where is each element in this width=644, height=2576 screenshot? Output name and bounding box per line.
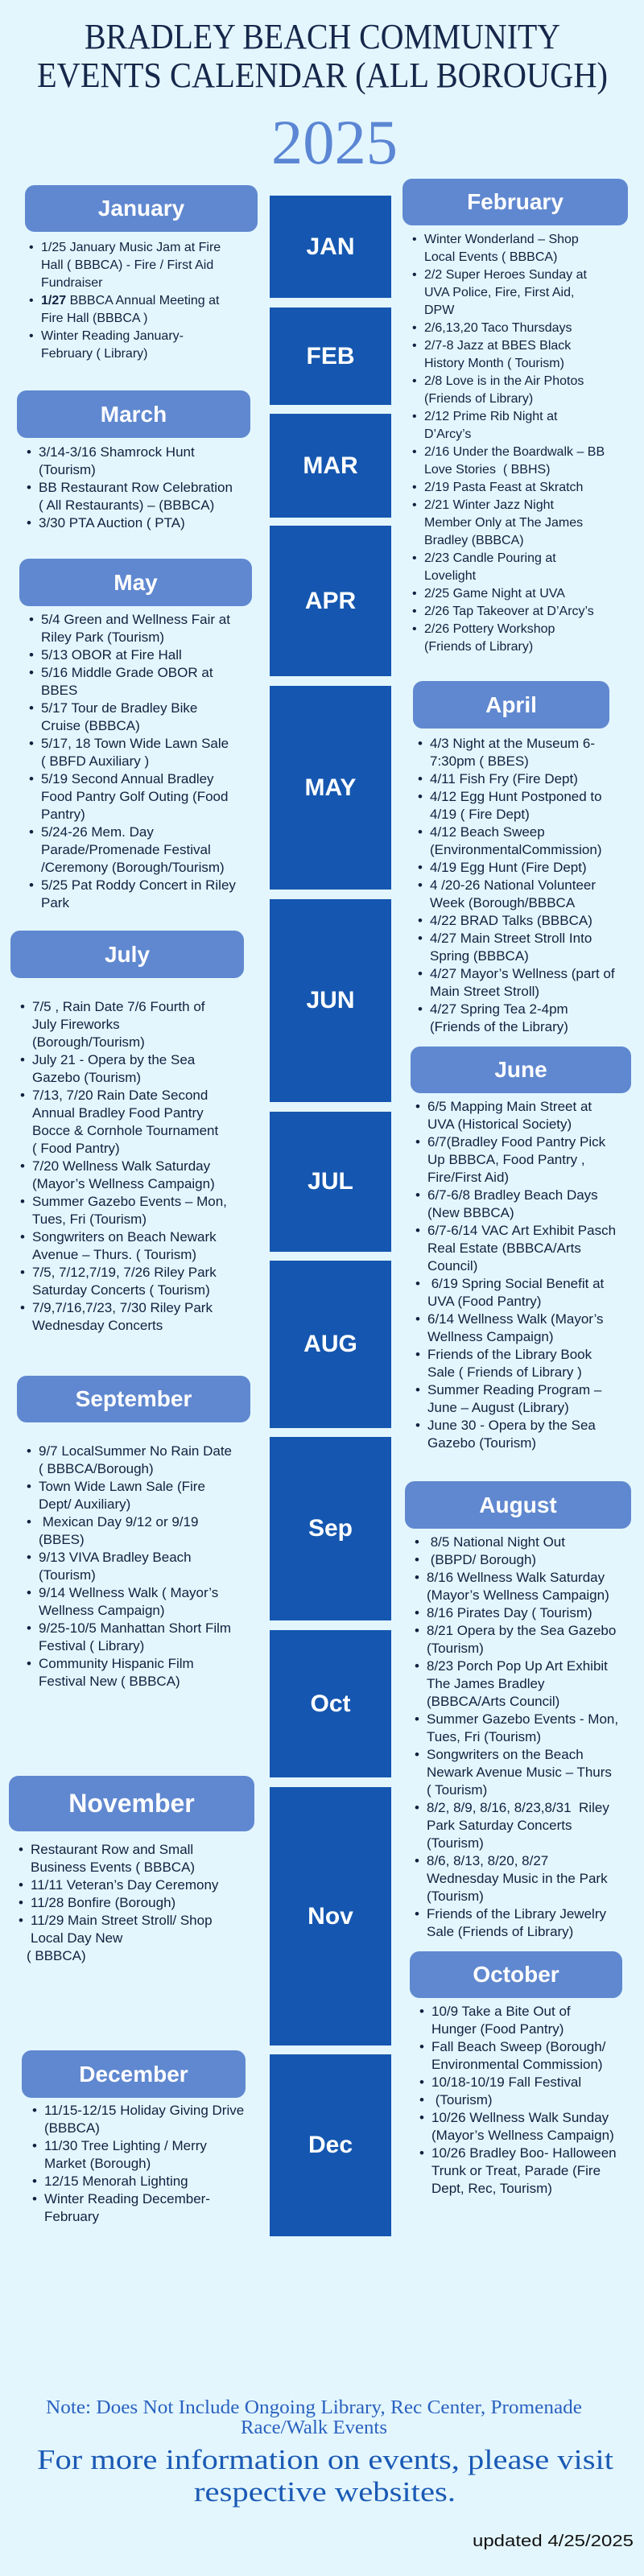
- list: February: Bradley (BBBCA): [424, 534, 524, 547]
- list: June: Wellness Campaign): [427, 1329, 554, 1344]
- more info text: For more information on events, please visit: [37, 2444, 613, 2475]
- list: February: 2/7-8 Jazz at BBES Black: [424, 339, 571, 353]
- list: April: Week (Borough/BBBCA: [430, 895, 575, 910]
- list: January: Winter Reading January-: [41, 329, 184, 343]
- list: April: [419, 736, 615, 1034]
- list: May: 5/13 OBOR at Fire Hall: [41, 647, 182, 663]
- header: March: [17, 390, 250, 438]
- list: October: Trunk or Treat, Parade (Fire: [431, 2163, 601, 2178]
- header: July: July: [105, 942, 150, 966]
- list: August: (Mayor’s Wellness Campaign): [427, 1587, 609, 1603]
- list: October: 10/26 Bradley Boo- Halloween: [431, 2145, 617, 2161]
- header: October: October: [473, 1962, 559, 1987]
- list: August: ( Tourism): [427, 1782, 487, 1798]
- list: November: Restaurant Row and Small: [31, 1842, 193, 1857]
- list: August: 8/2, 8/9, 8/16, 8/23,8/31 Riley: [427, 1800, 609, 1815]
- list: August: Tues, Fri (Tourism): [427, 1729, 541, 1744]
- list: June: Real Estate (BBBCA/Arts: [427, 1241, 581, 1256]
- list: September: 9/13 VIVA Bradley Beach: [39, 1550, 192, 1565]
- list: February: 2/6,13,20 Taco Thursdays: [424, 321, 572, 335]
- list: August: 8/16 Wellness Walk Saturday: [427, 1570, 605, 1585]
- list: May: Riley Park (Tourism): [41, 630, 164, 645]
- list: August: Park Saturday Concerts: [427, 1818, 572, 1833]
- list: June: Gazebo (Tourism): [427, 1435, 536, 1451]
- list: June: June – August (Library): [427, 1400, 569, 1415]
- list: June: UVA (Food Pantry): [427, 1294, 541, 1309]
- title: BRADLEY BEACH COMMUNITY: [85, 17, 560, 56]
- note text: [46, 2397, 582, 2438]
- list: October: (Mayor’s Wellness Campaign): [431, 2128, 614, 2143]
- list: July: Avenue – Thurs. ( Tourism): [32, 1247, 196, 1262]
- list: July: Gazebo (Tourism): [32, 1070, 141, 1085]
- title: EVENTS CALENDAR (ALL BOROUGH): [37, 56, 608, 95]
- header: August: [405, 1481, 631, 1529]
- header: September: [17, 1376, 250, 1422]
- list: July: (Mayor’s Wellness Campaign): [32, 1176, 215, 1191]
- list: June: June 30 - Opera by the Sea: [427, 1418, 596, 1433]
- list: April: 4/11 Fish Fry (Fire Dept): [430, 771, 578, 786]
- list: June: Up BBBCA, Food Pantry ,: [427, 1152, 585, 1167]
- list: December: 11/30 Tree Lighting / Merry: [44, 2138, 207, 2153]
- list: July: July 21 - Opera by the Sea: [32, 1052, 195, 1067]
- list: December: February: [44, 2209, 99, 2224]
- list: September: 9/14 Wellness Walk ( Mayor’s: [39, 1585, 218, 1600]
- list: June: Council): [427, 1258, 477, 1274]
- list: July: Saturday Concerts ( Tourism): [32, 1282, 210, 1298]
- header: September: September: [76, 1386, 192, 1411]
- list: July: 7/20 Wellness Walk Saturday: [32, 1158, 210, 1174]
- list: February: (Friends of Library): [424, 392, 533, 406]
- list: August: Sale (Friends of Library): [427, 1924, 573, 1939]
- list: June: 6/14 Wellness Walk (Mayor’s: [427, 1311, 604, 1327]
- updated date: updated 4/25/2025: [473, 2533, 634, 2550]
- list: July: 7/9,7/16,7/23, 7/30 Riley Park: [32, 1300, 213, 1315]
- list: August: (Tourism): [427, 1835, 484, 1851]
- header: December: December: [79, 2061, 188, 2087]
- list: October: [420, 2004, 617, 2196]
- header: June: June: [494, 1057, 547, 1082]
- list: July: Summer Gazebo Events – Mon,: [32, 1194, 227, 1209]
- list: April: Spring (BBBCA): [430, 948, 529, 964]
- list: February: DPW: [424, 303, 454, 317]
- list: November: Local Day New: [31, 1930, 122, 1946]
- list: February: 2/16 Under the Boardwalk – BB: [424, 445, 605, 459]
- list: December: (BBBCA): [44, 2120, 100, 2136]
- header: March: March: [101, 401, 167, 427]
- title: 2025: [271, 107, 398, 177]
- header: May: [19, 559, 252, 606]
- list: May: 5/17, 18 Town Wide Lawn Sale: [41, 736, 229, 751]
- list: June: 6/7(Bradley Food Pantry Pick: [427, 1134, 605, 1150]
- list: August: [415, 1534, 618, 1939]
- list: August: Songwriters on the Beach: [427, 1747, 584, 1762]
- list: September: 9/7 LocalSummer No Rain Date: [39, 1443, 232, 1459]
- list: February: 2/12 Prime Rib Night at: [424, 410, 557, 423]
- list: August: (Tourism): [427, 1889, 484, 1904]
- list: March: BB Restaurant Row Celebration: [39, 480, 233, 495]
- list: February: 2/2 Super Heroes Sunday at: [424, 268, 587, 282]
- list: February: UVA Police, Fire, First Aid,: [424, 286, 574, 299]
- list: September: [27, 1443, 232, 1689]
- list: September: 9/25-10/5 Manhattan Short Film: [39, 1620, 231, 1636]
- list: June: (New BBBCA): [427, 1205, 514, 1220]
- list: September: Dept/ Auxiliary): [39, 1496, 130, 1512]
- timeline month blocks: JUN: [306, 987, 354, 1013]
- header: June: [411, 1046, 631, 1093]
- list: April: 7:30pm ( BBES): [430, 753, 529, 769]
- list: August: (BBBCA/Arts Council): [427, 1694, 559, 1709]
- list: January: [29, 241, 221, 361]
- list: December: 12/15 Menorah Lighting: [44, 2174, 188, 2189]
- list: July: 7/13, 7/20 Rain Date Second: [32, 1088, 208, 1103]
- header: August: August: [479, 1492, 557, 1517]
- list: July: 7/5 , Rain Date 7/6 Fourth of: [32, 999, 205, 1014]
- header: July: [10, 931, 244, 978]
- list: May: 5/24-26 Mem. Day: [41, 824, 154, 840]
- list: September: Festival ( Library): [39, 1638, 144, 1653]
- list: August: The James Bradley: [427, 1676, 544, 1691]
- timeline month blocks: Oct: [310, 1690, 351, 1716]
- list: September: Community Hispanic Film: [39, 1656, 194, 1671]
- list: February: (Friends of Library): [424, 640, 533, 654]
- list: May: Park: [41, 895, 69, 910]
- list: October: Dept, Rec, Tourism): [431, 2181, 552, 2196]
- list: November: [19, 1842, 219, 1963]
- list: June: 6/7-6/8 Bradley Beach Days: [427, 1187, 598, 1203]
- list: April: 4/3 Night at the Museum 6-: [430, 736, 595, 751]
- list: October: (Tourism): [436, 2092, 493, 2107]
- list: December: [32, 2103, 244, 2224]
- list: February: 2/8 Love is in the Air Photos: [424, 374, 584, 388]
- note text: Note: Does Not Include Ongoing Library, Rec Center, Promenade: [46, 2397, 582, 2418]
- list: April: 4/27 Main Street Stroll Into: [430, 931, 592, 946]
- list: April: 4/12 Beach Sweep: [430, 824, 545, 840]
- list: May: 5/25 Pat Roddy Concert in Riley: [41, 877, 236, 893]
- timeline month blocks: Dec: [308, 2132, 353, 2158]
- list: August: Wednesday Music in the Park: [427, 1871, 608, 1886]
- list: January: Fundraiser: [41, 276, 102, 290]
- list: September: Mexican Day 9/12 or 9/19: [43, 1514, 198, 1530]
- list: October: 10/26 Wellness Walk Sunday: [431, 2110, 609, 2125]
- list: June: UVA (Historical Society): [427, 1117, 572, 1132]
- list: September: ( BBBCA/Borough): [39, 1461, 154, 1476]
- list: February: 2/23 Candle Pouring at: [424, 551, 556, 565]
- list: July: Tues, Fri (Tourism): [32, 1212, 147, 1227]
- list: February: 2/25 Game Night at UVA: [424, 587, 565, 601]
- list: April: (Friends of the Library): [430, 1019, 568, 1034]
- list: July: 7/5, 7/12,7/19, 7/26 Riley Park: [32, 1265, 217, 1280]
- note text: Race/Walk Events: [241, 2417, 387, 2438]
- list: November: 11/29 Main Street Stroll/ Shop: [31, 1913, 213, 1928]
- list: May: 5/16 Middle Grade OBOR at: [41, 665, 213, 680]
- list: November: 11/28 Bonfire (Borough): [31, 1895, 175, 1910]
- list: February: Lovelight: [424, 569, 476, 583]
- list: April: 4/22 BRAD Talks (BBBCA): [430, 913, 592, 928]
- list: December: Winter Reading December-: [44, 2191, 210, 2207]
- list: May: 5/4 Green and Wellness Fair at: [41, 612, 230, 627]
- list: February: 2/21 Winter Jazz Night: [424, 498, 554, 512]
- list: February: 2/26 Pottery Workshop: [424, 622, 555, 636]
- list: October: 10/9 Take a Bite Out of: [431, 2004, 571, 2019]
- list: May: 5/17 Tour de Bradley Bike: [41, 700, 197, 716]
- list: April: 4/19 ( Fire Dept): [430, 807, 530, 822]
- header: January: January: [98, 196, 184, 221]
- list: June: Friends of the Library Book: [427, 1347, 592, 1362]
- list: July: [21, 999, 227, 1333]
- list: June: Summer Reading Program –: [427, 1382, 601, 1397]
- list: September: (BBES): [39, 1532, 85, 1547]
- list: August: 8/21 Opera by the Sea Gazebo: [427, 1623, 616, 1638]
- list: February: History Month ( Tourism): [424, 357, 564, 370]
- header: October: [410, 1951, 622, 1998]
- list: June: 6/19 Spring Social Benefit at: [431, 1276, 604, 1291]
- timeline month blocks: JAN: [306, 233, 354, 259]
- list: November: 11/11 Veteran’s Day Ceremony: [31, 1877, 218, 1893]
- list: February: D’Arcy’s: [424, 427, 471, 441]
- list: October: Hunger (Food Pantry): [431, 2021, 564, 2037]
- list: June: 6/7-6/14 VAC Art Exhibit Pasch: [427, 1223, 616, 1238]
- timeline month blocks: Sep: [308, 1515, 353, 1542]
- list: January: Hall ( BBBCA) - Fire / First Aid: [41, 258, 213, 272]
- list: February: 2/19 Pasta Feast at Skratch: [424, 481, 583, 494]
- list: January: 1/27 BBBCA Annual Meeting at: [41, 294, 219, 308]
- list: May: /Ceremony (Borough/Tourism): [41, 860, 225, 875]
- header: April: [413, 681, 609, 729]
- list: April: (EnvironmentalCommission): [430, 842, 602, 857]
- list: November: Business Events ( BBBCA): [31, 1860, 195, 1875]
- list: November: ( BBBCA): [27, 1948, 86, 1963]
- list: August: 8/16 Pirates Day ( Tourism): [427, 1605, 592, 1620]
- header: November: [9, 1776, 254, 1831]
- header: December: [22, 2050, 246, 2098]
- more info text: [37, 2444, 613, 2508]
- list: August: Friends of the Library Jewelry: [427, 1906, 606, 1922]
- footer notes: [37, 2397, 634, 2550]
- list: June: [415, 1099, 616, 1451]
- list: July: Bocce & Cornhole Tournament: [32, 1123, 218, 1138]
- list: March: (Tourism): [39, 462, 96, 477]
- list: February: Love Stories ( BBHS): [424, 463, 551, 477]
- list: April: 4/27 Mayor’s Wellness (part of: [430, 966, 615, 981]
- list: October: Fall Beach Sweep (Borough/: [431, 2039, 605, 2054]
- list: February: Winter Wonderland – Shop: [424, 233, 579, 246]
- header: February: February: [467, 189, 564, 214]
- list: July: Annual Bradley Food Pantry: [32, 1105, 204, 1121]
- list: March: 3/30 PTA Auction ( PTA): [39, 515, 185, 530]
- header: February: [402, 179, 628, 225]
- list: March: 3/14-3/16 Shamrock Hunt: [39, 444, 195, 460]
- list: April: Main Street Stroll): [430, 984, 539, 999]
- list: April: 4/12 Egg Hunt Postponed to: [430, 789, 602, 804]
- list: August: (BBPD/ Borough): [431, 1552, 536, 1567]
- list: January: Fire Hall (BBBCA ): [41, 312, 147, 325]
- list: April: 4 /20-26 National Volunteer: [430, 877, 596, 893]
- list: August: Newark Avenue Music – Thurs: [427, 1765, 612, 1780]
- list: August: 8/5 National Night Out: [431, 1534, 565, 1550]
- list: May: Pantry): [41, 807, 85, 822]
- header: January: [25, 185, 258, 232]
- timeline month blocks: MAY: [305, 774, 356, 800]
- list: September: (Tourism): [39, 1567, 96, 1583]
- list: February: [412, 233, 605, 654]
- timeline month blocks: JUL: [308, 1168, 353, 1195]
- list: July: (Borough/Tourism): [32, 1034, 145, 1050]
- list: May: 5/19 Second Annual Bradley: [41, 771, 214, 786]
- list: April: 4/19 Egg Hunt (Fire Dept): [430, 860, 587, 875]
- list: September: Wellness Campaign): [39, 1603, 165, 1618]
- header: May: May: [114, 570, 158, 594]
- list: August: (Tourism): [427, 1641, 484, 1656]
- list: September: Town Wide Lawn Sale (Fire: [39, 1479, 205, 1494]
- list: August: 8/23 Porch Pop Up Art Exhibit: [427, 1658, 608, 1674]
- list: March: ( All Restaurants) – (BBBCA): [39, 497, 214, 513]
- list: December: Market (Borough): [44, 2156, 151, 2171]
- header: April: April: [485, 692, 537, 716]
- header: November: November: [68, 1789, 195, 1818]
- list: May: BBES: [41, 683, 77, 698]
- list: May: [29, 612, 236, 910]
- list: February: Local Events ( BBBCA): [424, 250, 557, 264]
- timeline month blocks: Nov: [308, 1903, 353, 1929]
- title: [37, 17, 608, 177]
- timeline month blocks: MAR: [303, 452, 358, 478]
- list: May: Food Pantry Golf Outing (Food: [41, 789, 228, 804]
- list: September: Festival New ( BBBCA): [39, 1674, 180, 1689]
- list: May: ( BBFD Auxiliary ): [41, 753, 149, 769]
- list: July: ( Food Pantry): [32, 1141, 120, 1156]
- list: July: Songwriters on Beach Newark: [32, 1229, 217, 1245]
- list: January: 1/25 January Music Jam at Fire: [41, 241, 221, 254]
- list: May: Cruise (BBBCA): [41, 718, 140, 733]
- list: April: 4/27 Spring Tea 2-4pm: [430, 1001, 568, 1017]
- list: July: Wednesday Concerts: [32, 1318, 163, 1333]
- list: June: Fire/First Aid): [427, 1170, 509, 1185]
- list: August: Summer Gazebo Events - Mon,: [427, 1711, 618, 1727]
- list: February: Member Only at The James: [424, 516, 583, 530]
- list: October: Environmental Commission): [431, 2057, 603, 2072]
- list: May: Parade/Promenade Festival: [41, 842, 211, 857]
- list: December: 11/15-12/15 Holiday Giving Drive: [44, 2103, 244, 2118]
- timeline month blocks: AUG: [303, 1331, 357, 1357]
- list: June: Sale ( Friends of Library ): [427, 1364, 582, 1380]
- list: February: 2/26 Tap Takeover at D’Arcy’s: [424, 605, 594, 618]
- timeline month blocks: APR: [305, 588, 356, 613]
- more info text: respective websites.: [194, 2476, 456, 2508]
- list: March: [27, 444, 233, 530]
- list: October: 10/18-10/19 Fall Festival: [431, 2074, 581, 2090]
- list: June: 6/5 Mapping Main Street at: [427, 1099, 592, 1114]
- list: January: February ( Library): [41, 347, 147, 361]
- list: August: 8/6, 8/13, 8/20, 8/27: [427, 1853, 548, 1868]
- timeline month blocks: FEB: [306, 343, 354, 369]
- list: July: July Fireworks: [32, 1017, 120, 1032]
